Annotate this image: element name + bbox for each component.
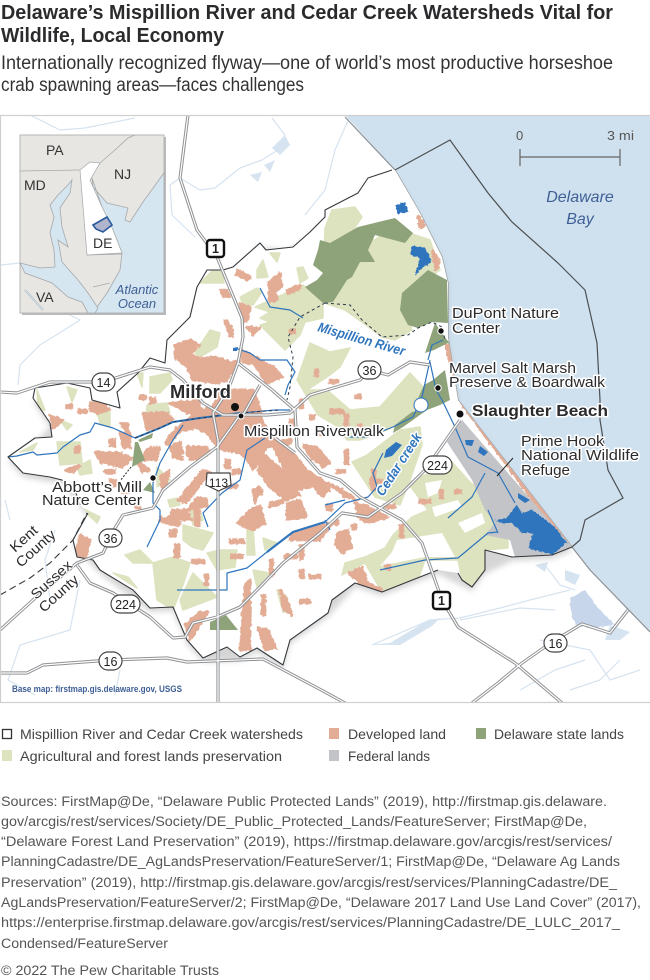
route shield 1 north <box>207 240 224 257</box>
route shield 1 south: 1 <box>438 594 445 608</box>
base map credit: Base map: firstmap.gis.delaware.gov, USGS <box>12 684 182 695</box>
inset labels: DE <box>93 235 112 251</box>
watershed outline <box>8 170 572 665</box>
label: DuPont Nature Center: DuPont Nature <box>452 305 559 322</box>
white gaps in preservation lands <box>380 480 485 566</box>
label: Mispillion Riverwalk <box>238 413 385 440</box>
federal lands <box>447 420 572 557</box>
route shield 36 east <box>358 361 381 379</box>
sources: PlanningCadastre/DE_AgLandsPreservation/FeatureServer/1; FirstMap@De, “Delaware Ag Lands <box>1 854 620 869</box>
water bodies <box>233 202 567 555</box>
map frame <box>0 116 650 702</box>
route shield 224 west: 224 <box>115 598 136 612</box>
label: Sussex County: County <box>35 571 82 615</box>
label: Prime Hook National Wildlife Refuge: Refuge <box>521 462 570 479</box>
dashed sub-watershed divide <box>135 303 445 438</box>
sources: https://enterprise.firstmap.delaware.gov/arcgis/rest/services/PlanningCadastre/DE_LULC_2017_ <box>1 915 621 930</box>
label: Milford: Milford <box>170 382 231 402</box>
Delaware state lands <box>132 218 460 630</box>
inset labels <box>24 142 131 305</box>
label: Sussex County <box>27 557 82 615</box>
label: Abbott's Mill Nature Center <box>42 475 156 509</box>
scale bar <box>516 128 634 166</box>
subtitle: Internationally recognized flyway—one of world’s most productive horseshoe <box>1 53 613 74</box>
inset ocean label: Ocean <box>118 296 156 311</box>
sources: Condensed/FeatureServer <box>1 936 169 951</box>
route shield 14 <box>92 373 115 391</box>
inset locator map <box>20 135 166 315</box>
inset labels: MD <box>24 177 46 193</box>
inset watershed locator <box>93 217 112 232</box>
label: DuPont Nature Center <box>438 305 559 337</box>
roads <box>0 115 628 703</box>
sources: AgLandsPreservation/FeatureServer/2; FirstMap@De, “Delaware 2017 Land Use Land Cover” (2017), <box>1 895 641 910</box>
route shield 36 west: 36 <box>104 532 117 546</box>
label: Kent County: Kent <box>6 522 41 555</box>
leader line: Prime Hook <box>497 458 513 476</box>
inset labels: VA <box>36 289 54 305</box>
inset labels: NJ <box>114 166 131 182</box>
scale bar: 3 mi <box>607 128 634 143</box>
route shield 1 north: 1 <box>212 242 219 256</box>
watershed area <box>8 170 572 665</box>
inset Chesapeake Bay <box>20 180 98 313</box>
route shield 14: 14 <box>97 376 110 390</box>
sources: “Delaware Forest Land Preservation” (2019), https://firstmap.delaware.gov/arcgis/rest/services/ <box>1 834 612 849</box>
sources: Preservation” (2019), http://firstmap.gis.delaware.gov/arcgis/rest/services/PlanningCadastre/DE_ <box>1 875 618 890</box>
subtitle <box>1 53 613 96</box>
route shield 224 east: 224 <box>427 459 448 473</box>
label: Sussex County: Sussex <box>27 557 75 602</box>
label: Slaughter Beach: Slaughter Beach <box>472 403 608 420</box>
label: Milford <box>170 382 239 411</box>
inset ocean label: Atlantic <box>115 282 159 297</box>
route shield 16 east: 16 <box>549 637 562 651</box>
title: Wildlife, Local Economy <box>1 25 225 47</box>
route shield 224 west <box>111 595 140 613</box>
route shield 16 west <box>99 652 122 670</box>
route shield 224 east <box>423 456 452 474</box>
label: Cedar creek: Cedar creek <box>373 429 425 499</box>
label: Mispillion Riverwalk: Mispillion Riverwalk <box>244 423 385 440</box>
legend: state lands: Delaware state lands <box>494 726 624 742</box>
agricultural and forest lands <box>20 207 508 612</box>
route shield 1 south <box>433 592 450 609</box>
watershed shadow <box>8 245 572 668</box>
rivers <box>8 288 515 590</box>
title <box>1 2 613 47</box>
inset ocean label <box>115 282 159 311</box>
label: Abbott's Mill Nature Center: Nature Center <box>42 493 142 509</box>
label: Delaware Bay: Delaware <box>546 189 614 206</box>
label: Marvel Salt Marsh Preserve and Boardwalk <box>435 360 606 391</box>
copyright: © 2022 The Pew Charitable Trusts <box>1 963 219 978</box>
subtitle: crab spawning areas—faces challenges <box>1 75 304 96</box>
legend: federal lands: Federal lands <box>348 748 430 764</box>
inset ocean water <box>92 173 164 313</box>
label: Marvel Salt Marsh Preserve and Boardwalk: Preserve & Boardwalk <box>449 374 606 391</box>
Delaware Bay water <box>345 115 650 632</box>
label: Marvel Salt Marsh Preserve and Boardwalk: Marvel Salt Marsh <box>449 360 576 377</box>
legend: developed land: Developed land <box>348 726 446 742</box>
state boundary line in bay <box>345 117 650 632</box>
route shield 36 east: 36 <box>363 364 376 378</box>
legend <box>2 726 624 764</box>
route shield 113 <box>206 473 231 491</box>
legend: agricultural: Agricultural and forest lands preservation <box>20 748 282 764</box>
label: Delaware Bay: Bay <box>566 211 595 228</box>
label: Prime Hook National Wildlife Refuge: National Wildlife <box>521 447 639 464</box>
label: Prime Hook National Wildlife Refuge <box>521 433 639 479</box>
scattered developed parcels <box>40 330 461 615</box>
route shield 36 west <box>99 529 122 547</box>
route shield 113: 113 <box>209 476 228 490</box>
label: Mispillion River: Mispillion River <box>316 319 407 359</box>
title: Delaware’s Mispillion River and Cedar Creek Watersheds Vital for <box>1 2 613 24</box>
developed land <box>40 215 572 650</box>
label: Delaware Bay <box>546 189 614 228</box>
label: Prime Hook National Wildlife Refuge: Prime Hook <box>521 433 605 450</box>
label: Abbott's Mill Nature Center: Abbott’s Mill <box>52 480 142 496</box>
inset Delaware <box>80 162 122 255</box>
leader line: Abbott's Mill <box>120 467 131 481</box>
scale bar: 0 <box>516 128 523 143</box>
sources <box>1 794 641 951</box>
route shield 16 east <box>544 634 567 652</box>
county line <box>0 513 87 595</box>
inset labels: PA <box>46 142 64 158</box>
route shield 16 west: 16 <box>104 655 117 669</box>
background streams <box>1 115 640 695</box>
label: Kent County: County <box>12 526 59 570</box>
sources: Sources: FirstMap@De, “Delaware Public Protected Lands” (2019), http://firstmap.gis.delaware. <box>1 794 607 809</box>
sources: gov/arcgis/rest/services/Society/DE_Public_Protected_Lands/FeatureServer; FirstMap@De, <box>1 814 587 829</box>
legend: watersheds: Mispillion River and Cedar Creek watersheds <box>20 726 303 742</box>
label: DuPont Nature Center: Center <box>452 320 500 337</box>
